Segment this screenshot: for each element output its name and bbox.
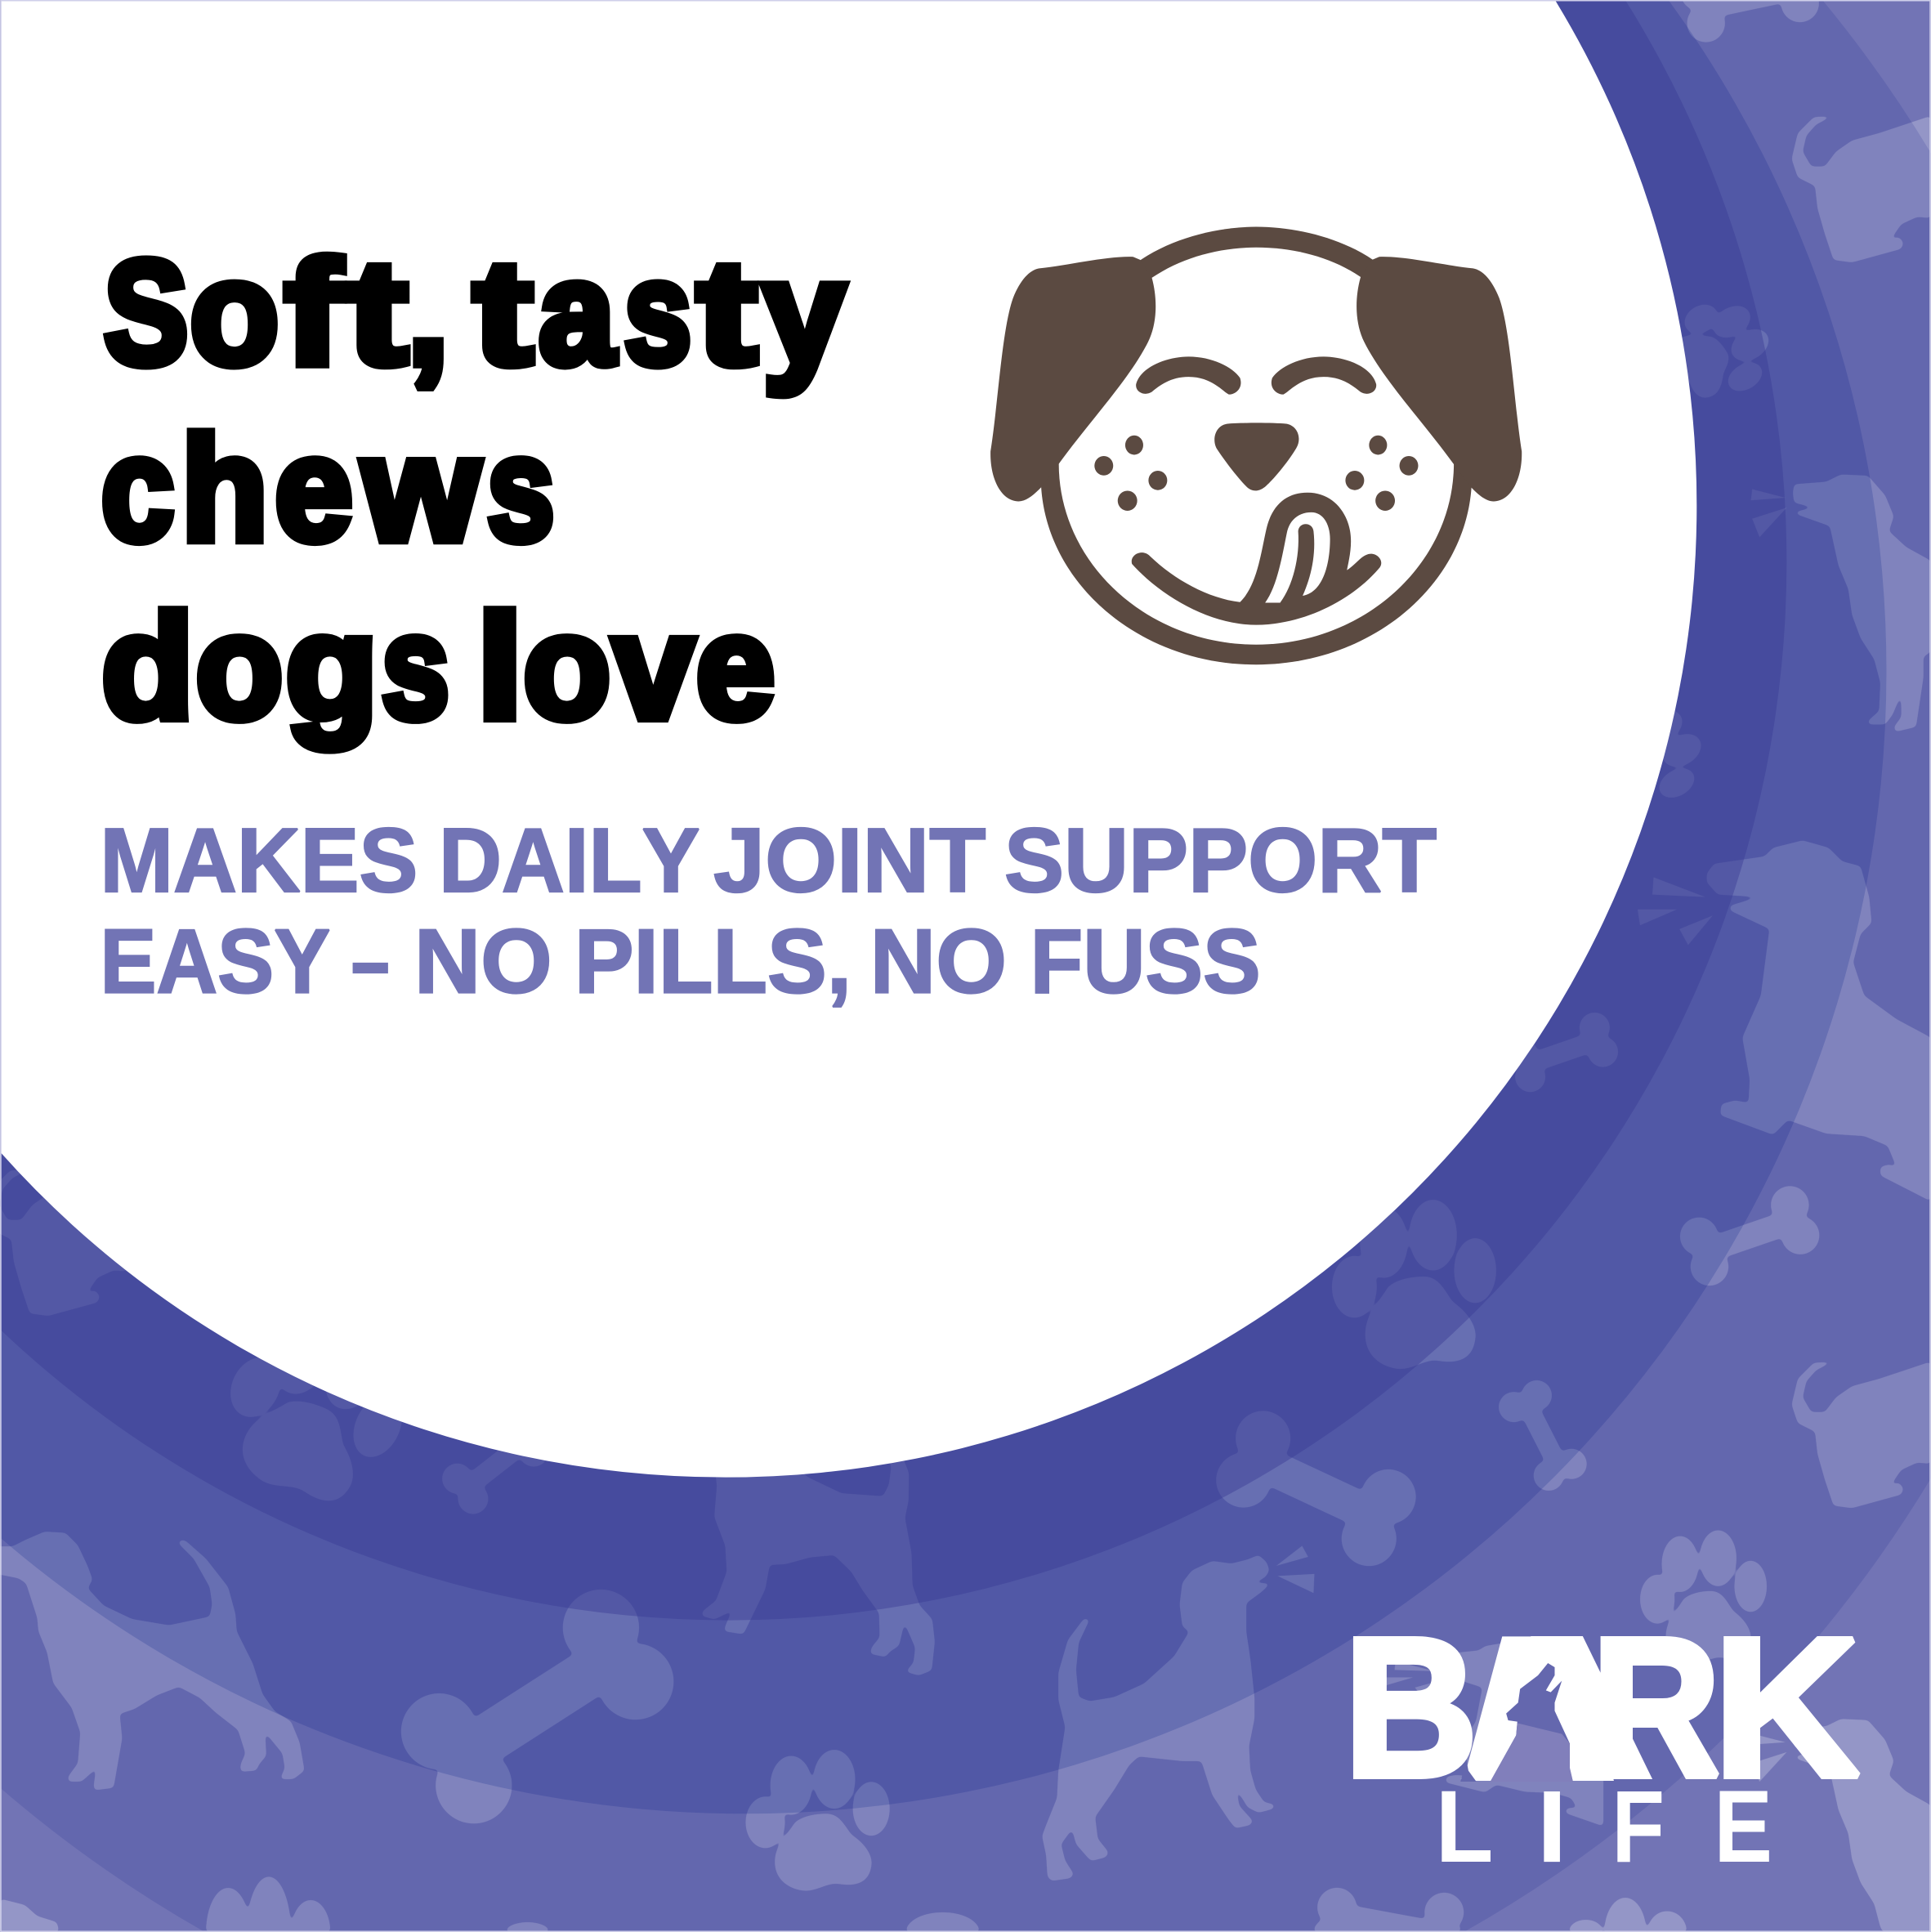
logo wordmark BARK (1344, 1599, 1859, 1818)
paw: upper right (1654, 283, 1786, 416)
subheading: NO (414, 910, 552, 1012)
subheading: EASY (100, 910, 330, 1012)
heading: l (477, 585, 523, 750)
bone: large (387, 1575, 688, 1838)
subheading: MAKES (100, 809, 418, 911)
paw toes: bottom right (1568, 1898, 1687, 1932)
heading: t (474, 230, 533, 396)
heading: f (285, 230, 342, 396)
tongue highlight (1265, 512, 1330, 602)
heading: o (196, 585, 283, 750)
paw: centre right (1332, 1200, 1496, 1369)
white circle panel (0, 0, 1696, 1478)
bone: right (1674, 1181, 1825, 1291)
dog rump: top right (1791, 116, 1931, 262)
dog: behind the white circle (598, 1347, 998, 1689)
bone: right of circle (1503, 1008, 1622, 1096)
dog: barking, bottom centre (1042, 1555, 1275, 1881)
subheading: SUPPORT (1004, 809, 1437, 911)
nose (1214, 423, 1299, 490)
heading: t (697, 230, 757, 396)
logo wordmark BARK: R (1592, 1599, 1720, 1818)
heading: y (762, 230, 845, 396)
heading: c (101, 407, 174, 572)
logo word LIFE: F (1611, 1769, 1665, 1884)
smile and tongue (1132, 493, 1381, 625)
heading: t (348, 230, 407, 396)
subheading: PILLS, (574, 910, 852, 1012)
freckles (1094, 436, 1418, 511)
dog head: bottom left corner (0, 1898, 60, 1932)
dog rump: middle right (1791, 1362, 1931, 1508)
subheading (100, 809, 1437, 1012)
face interior (1059, 248, 1454, 645)
heading: e (696, 585, 775, 750)
subheading: DAILY (439, 809, 700, 911)
right eye (1272, 356, 1376, 395)
heading: e (275, 407, 353, 572)
dog: large, right edge (1706, 840, 1931, 1201)
heading (101, 230, 845, 750)
dog: lower right edge (1793, 1719, 1931, 1932)
heading: d (101, 585, 194, 750)
dog: upper right edge (1793, 474, 1931, 732)
logo wordmark BARK: K (1714, 1599, 1859, 1818)
heading: v (613, 585, 694, 750)
logo dog lower body (1491, 1723, 1573, 1782)
head outline (1041, 227, 1472, 664)
logo dog paw sliver (1460, 1760, 1477, 1782)
heading: , (407, 230, 449, 396)
bark marks (1276, 490, 1786, 1782)
heading: g (285, 585, 378, 750)
subheading: JOINT (713, 809, 986, 911)
logo word LIFE: E (1714, 1769, 1772, 1884)
left ear (990, 257, 1155, 501)
logo word LIFE: L (1436, 1769, 1494, 1884)
subheading: – (351, 910, 390, 1012)
logo word LIFE: I (1536, 1769, 1567, 1884)
heading: o (190, 230, 279, 396)
bone: lower left of circle (436, 1410, 555, 1520)
logo wordmark BARK: A (1461, 1599, 1652, 1818)
paw: above logo (1640, 1530, 1767, 1664)
heading: S (104, 230, 188, 396)
logo howling dog (1460, 1636, 1614, 1782)
paw toes: bottom centre (505, 1912, 980, 1932)
subheading: FUSS (1030, 910, 1261, 1012)
bone: top edge (1677, 0, 1822, 46)
heading: w (361, 407, 481, 572)
heading: o (523, 585, 610, 750)
background: band 1 (0, 0, 1786, 1621)
tongue centre line (1276, 524, 1315, 610)
bone: bottom edge (1313, 1888, 1464, 1932)
left eye (1136, 356, 1240, 395)
paw: lower left of circle (199, 1298, 428, 1525)
heading: a (539, 230, 616, 396)
dog: behind the logo (1435, 1642, 1603, 1827)
icon: dog licking its lips (990, 227, 1522, 664)
logo dog knockout (1491, 1663, 1573, 1782)
paw: right of circle (1583, 686, 1719, 823)
logo A body (1464, 1636, 1614, 1781)
right ear (1357, 257, 1522, 501)
heading: h (181, 407, 268, 572)
subheading: NO (870, 910, 1007, 1012)
bone: small diagonal (1493, 1375, 1592, 1496)
logo wordmark BARK: B (1344, 1599, 1477, 1818)
paw toes: bottom left (206, 1876, 330, 1932)
dog: lower left (0, 1532, 305, 1791)
dog rump: left edge (0, 1169, 127, 1316)
heading: s (382, 585, 449, 750)
logo: Bark Life (1344, 1599, 1859, 1884)
heading: s (624, 230, 691, 396)
bone: centre (1207, 1402, 1425, 1575)
heading: s (487, 407, 555, 572)
paw: bottom centre (745, 1750, 890, 1891)
